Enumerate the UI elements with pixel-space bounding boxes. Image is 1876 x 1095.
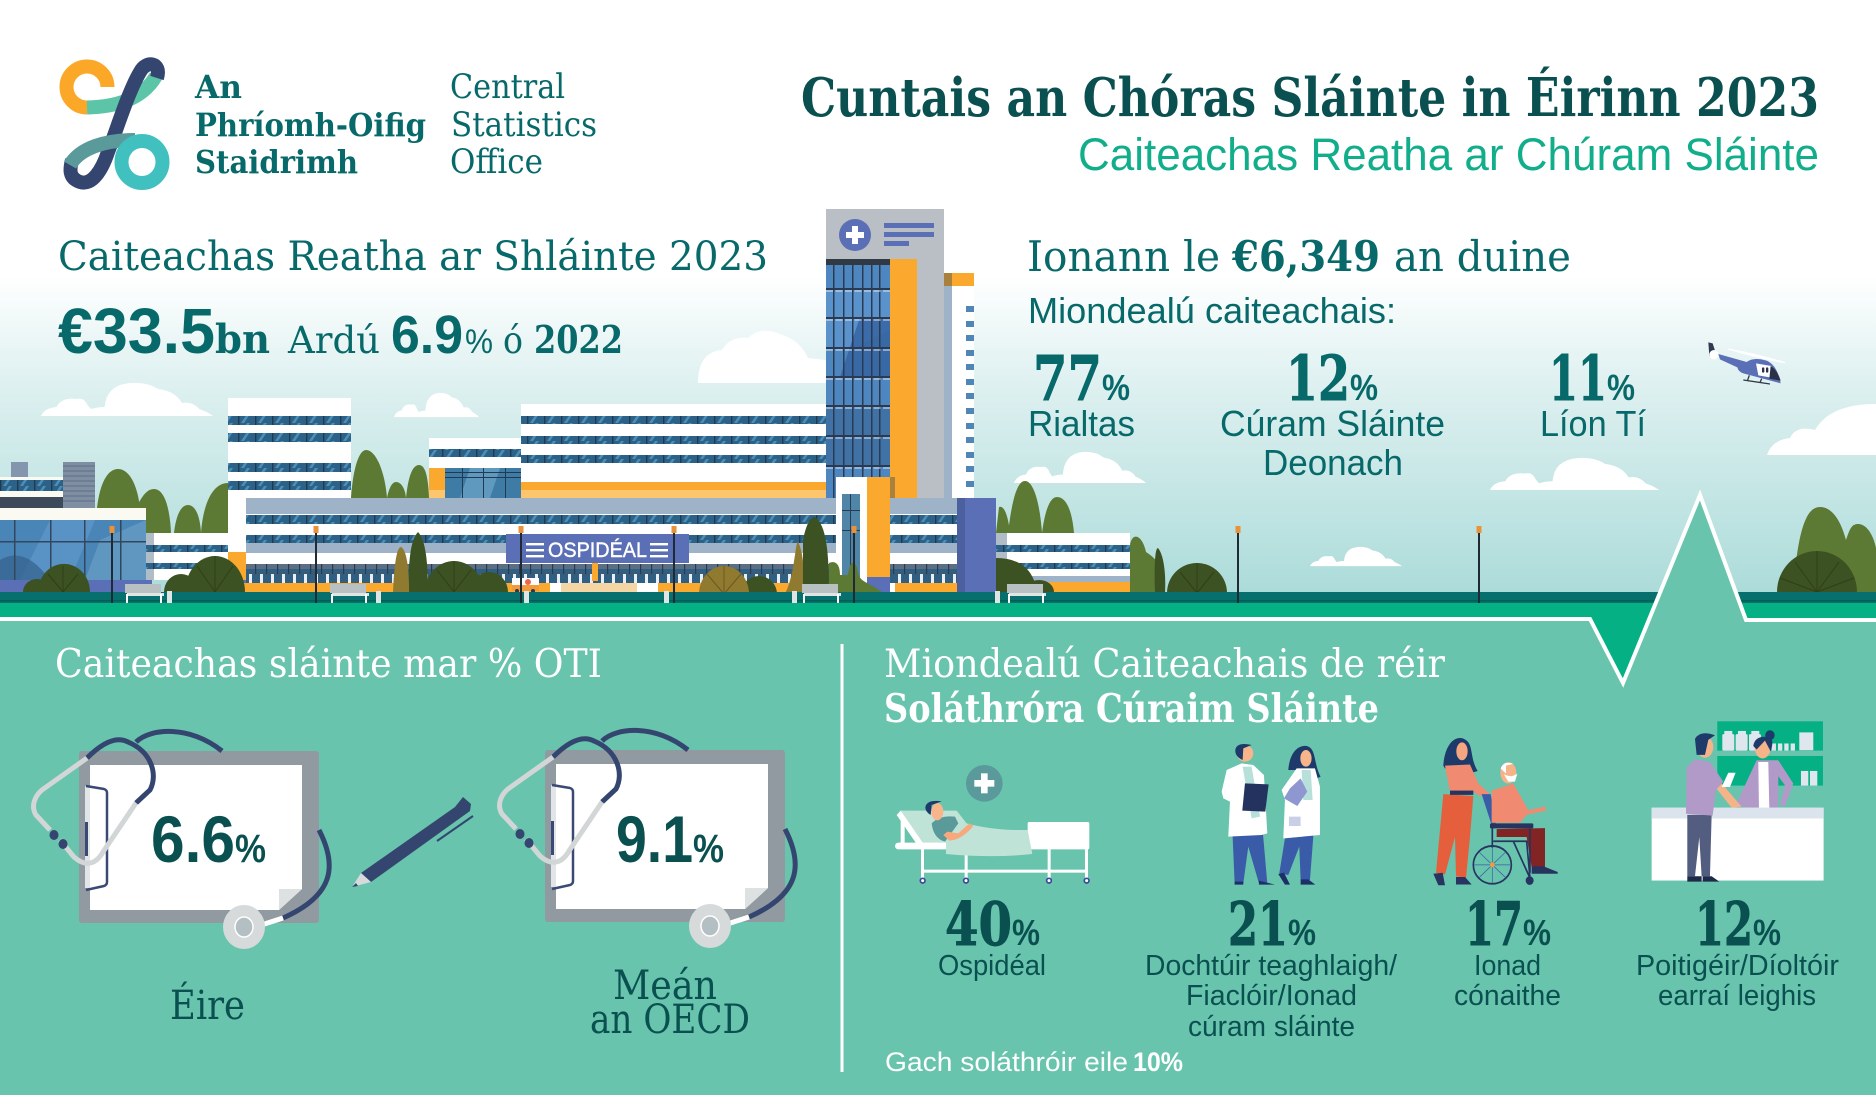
helicopter [1708, 342, 1785, 384]
low wing [146, 533, 228, 580]
stat: government 77%: Rialtas [1028, 403, 1135, 444]
stat: GPs, dentists, health care centres 21%: cúram sláinte [1188, 1011, 1355, 1043]
benches [125, 584, 1046, 603]
stat: GPs, dentists, health care centres 21%: 21 [1228, 890, 1288, 960]
stat: residential care 17%: Ionad [1474, 950, 1541, 982]
headline figure: total expenditure and increase: €33.5 [58, 295, 215, 367]
footnote: all other providers 10%: 10% [1133, 1047, 1183, 1077]
vertical divider [840, 644, 844, 1072]
icon: pharmacy counter [1652, 721, 1824, 882]
heading: breakdown by health care provider: Soláthróra Cúraim Sláinte [884, 686, 1379, 732]
sky background [0, 0, 1876, 600]
stat: GPs, dentists, health care centres 21% [1145, 890, 1398, 1043]
icon: hospital bed [895, 765, 1089, 883]
heading: breakdown by health care provider [884, 642, 1445, 732]
subtitle: Caiteachas Reatha ar Chúram Sláinte [1078, 129, 1819, 180]
headline figure: total expenditure and increase: ó [503, 319, 523, 362]
icon: doctors [1222, 744, 1321, 885]
stat: hospital 40%: % [1012, 912, 1040, 953]
headline figure: total expenditure and increase: Ardú [287, 319, 380, 362]
label: OECD average [590, 963, 750, 1043]
lamp posts [110, 526, 1482, 603]
main block [242, 498, 957, 592]
stat: residential care 17%: 17 [1465, 890, 1523, 960]
icon: carer with wheelchair user [1433, 738, 1558, 885]
footnote: all other providers 10%: Gach soláthróir eile [885, 1047, 1128, 1077]
logo wordmark: Irish: An [194, 68, 242, 106]
stat: voluntary health care 12% [1220, 342, 1445, 483]
headline figure: total expenditure and increase: % [465, 323, 493, 361]
side service tower [944, 273, 974, 498]
ground and road [0, 592, 1876, 713]
stat: hospital 40% [938, 890, 1046, 982]
section heading: current health expenditure: Caiteachas Reatha ar Shláinte 2023 [58, 234, 768, 280]
stat: pharmacies 12%: % [1753, 912, 1781, 953]
tall white block [228, 398, 351, 592]
middle block [429, 438, 521, 498]
left glass building [0, 462, 152, 592]
stat: government 77%: 77 [1033, 342, 1102, 415]
hospital sign: OSPIDÉAL [548, 539, 647, 562]
logo mark [66, 64, 162, 183]
stat: residential care 17%: cónaithe [1454, 980, 1561, 1012]
stat: government 77%: % [1102, 367, 1130, 408]
stat: GPs, dentists, health care centres 21%: Fiaclóir/Ionad [1186, 980, 1357, 1012]
stat: hospital 40%: 40 [945, 890, 1012, 960]
clipboard: Ireland 6.6% [34, 731, 329, 949]
headline figure: total expenditure and increase: bn [215, 316, 270, 363]
stat: government 77% [1028, 342, 1135, 444]
stat: GPs, dentists, health care centres 21%: Dochtúir teaghlaigh/ [1145, 950, 1398, 982]
stat: voluntary health care 12%: % [1350, 367, 1378, 408]
stat: pharmacies 12% [1636, 890, 1839, 1012]
logo wordmark: English: Office [450, 142, 543, 182]
entrance tower [836, 477, 895, 592]
stat: voluntary health care 12%: 12 [1286, 342, 1350, 415]
purple column [957, 498, 996, 592]
lower panel with heartbeat line [0, 495, 1876, 1095]
headline figure: total expenditure and increase: 6.9 [391, 305, 463, 365]
logo wordmark: English: Central [450, 67, 565, 107]
heading: breakdown by health care provider: Miondealú Caiteachais de réir [884, 642, 1445, 687]
stat: households 11%: % [1607, 367, 1635, 408]
label: OECD average: Meán [613, 963, 717, 1009]
hospital building complex [0, 209, 1130, 593]
per person figure: Ionann le [1027, 232, 1220, 281]
foreground bushes and trees [23, 517, 1857, 595]
stat: residential care 17%: % [1523, 912, 1551, 953]
clipboard: Ireland 6.6%: 6.6 [151, 802, 235, 876]
stat: households 11% [1540, 342, 1646, 444]
headline figure: total expenditure and increase: 2022 [534, 317, 623, 362]
icon: pen [352, 797, 473, 887]
logo wordmark: Irish: Phríomh-Oifig [195, 106, 426, 144]
label: Ireland: Éire [170, 982, 245, 1029]
main tower [826, 209, 944, 498]
breakdown heading: Miondealú caiteachais: [1028, 290, 1396, 331]
label: OECD average: an OECD [590, 997, 750, 1043]
stat: households 11%: 11 [1549, 342, 1607, 415]
stat: voluntary health care 12%: Deonach [1263, 442, 1403, 483]
per person figure [1027, 232, 1571, 281]
logo wordmark: Irish [194, 68, 426, 181]
stat: pharmacies 12%: earraí leighis [1658, 980, 1816, 1012]
clipboard: OECD average 9.1% [500, 730, 795, 948]
headline figure: total expenditure and increase [58, 295, 623, 367]
stat: residential care 17% [1454, 890, 1561, 1012]
heading: health spending as % GNI: Caiteachas sláinte mar % OTI [55, 642, 602, 687]
stat: voluntary health care 12%: Cúram Sláinte [1220, 403, 1445, 444]
per person figure: €6,349 [1231, 232, 1380, 281]
clouds [41, 331, 1876, 566]
per person figure: an duine [1394, 232, 1571, 281]
ambulance [512, 578, 539, 593]
hospital sign [506, 534, 689, 581]
clipboard: Ireland 6.6%: % [235, 827, 266, 871]
long upper wing [521, 404, 826, 498]
logo wordmark: English: Statistics [451, 105, 597, 145]
stat: pharmacies 12%: Poitigéir/Díoltóir [1636, 950, 1839, 982]
tower sign plus icon [839, 219, 871, 251]
right low wing [996, 533, 1130, 592]
stat: hospital 40%: Ospidéal [938, 950, 1046, 982]
background trees [97, 450, 1876, 592]
stat: pharmacies 12%: 12 [1695, 890, 1753, 960]
stat: GPs, dentists, health care centres 21%: % [1288, 912, 1316, 953]
logo wordmark: Irish: Staidrimh [195, 143, 358, 181]
stat: households 11%: Líon Tí [1540, 403, 1646, 444]
clipboard: OECD average 9.1%: 9.1 [616, 802, 693, 876]
clipboard: OECD average 9.1%: % [693, 827, 724, 871]
logo wordmark: English [450, 67, 597, 182]
